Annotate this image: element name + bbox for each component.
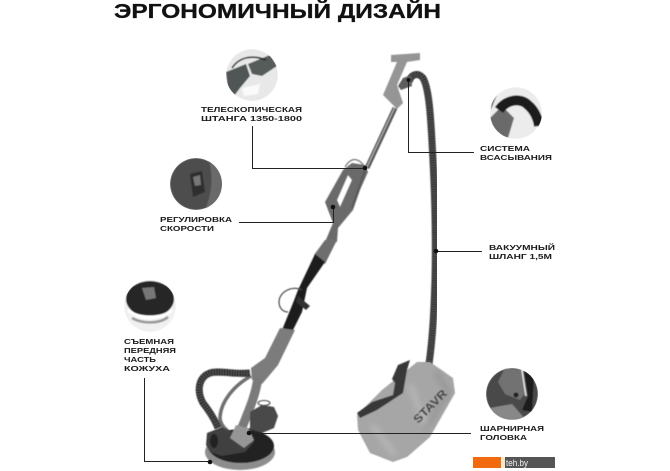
upper grey sleeve	[314, 240, 337, 264]
head disc	[205, 434, 275, 470]
label: СЪЕМНАЯ	[124, 337, 174, 346]
callout: telescopic pole: ШТАНГА 1350-1800	[201, 114, 302, 123]
watermark badge: teh.by	[506, 458, 528, 468]
callout: vacuum hose: ШЛАНГ 1,5М	[489, 252, 552, 261]
lower sleeve	[251, 328, 295, 384]
callout: removable cover	[124, 280, 212, 464]
label: ТЕЛЕСКОПИЧЕСКАЯ	[201, 105, 302, 114]
photo circle	[226, 49, 278, 101]
leader line	[252, 126, 365, 168]
leader line	[144, 378, 210, 462]
title: ЭРГОНОМИЧНЫЙ ДИЗАЙН	[114, 0, 441, 23]
callout: suction system: ВСАСЫВАНИЯ	[480, 153, 552, 162]
leader line	[436, 250, 482, 252]
callout: telescopic pole	[201, 49, 367, 170]
pole loop	[279, 288, 302, 312]
watermark badge	[473, 457, 555, 468]
label: РЕГУЛИРОВКА	[160, 215, 233, 224]
photo circle	[170, 158, 224, 212]
callout: swivel head	[247, 368, 544, 442]
leader line	[249, 432, 471, 434]
product: dust bag	[357, 360, 455, 462]
top handle	[383, 53, 420, 109]
label: ВАКУУМНЫЙ	[489, 243, 555, 252]
bag folds	[372, 372, 448, 455]
callout: speed control	[160, 158, 335, 233]
bag logo: STAVR	[412, 387, 450, 426]
callout: suction system	[406, 78, 552, 162]
middle handle	[325, 163, 368, 242]
head housing	[206, 427, 254, 456]
dark pole section	[282, 254, 325, 330]
callout: swivel head: ГОЛОВКА	[480, 433, 528, 442]
label: ШАРНИРНАЯ	[480, 424, 544, 433]
leader line	[408, 80, 474, 152]
callout: removable cover: ЧАСТЬ	[124, 355, 157, 364]
product: sander body	[199, 53, 420, 470]
neck arms	[220, 376, 251, 431]
bag strap	[357, 360, 410, 418]
photo circle	[124, 280, 176, 332]
telescopic pole	[367, 108, 395, 168]
photo circle	[490, 87, 542, 139]
product: vacuum hose	[409, 75, 435, 364]
trigger loop	[345, 160, 365, 167]
callout: vacuum hose	[434, 243, 555, 261]
callout: removable cover: КОЖУХА	[124, 364, 171, 373]
callout: speed control: СКОРОСТИ	[160, 224, 214, 233]
leader line	[239, 207, 334, 222]
label: СИСТЕМА	[480, 144, 531, 153]
motor	[250, 405, 278, 438]
photo circle	[486, 368, 538, 420]
callout: removable cover: ПЕРЕДНЯЯ	[124, 346, 176, 355]
coiled hose	[199, 372, 250, 428]
